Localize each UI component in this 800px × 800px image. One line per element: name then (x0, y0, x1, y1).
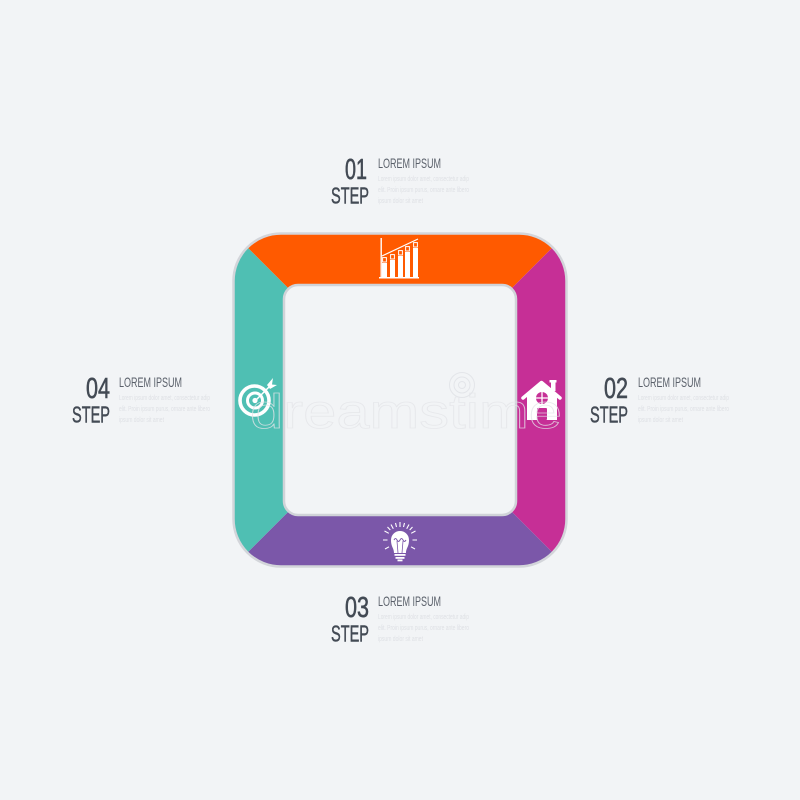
step 04 body text (119, 395, 210, 424)
step 03 number: 03 (345, 592, 369, 624)
step 03 body text: Lorem ipsum dolor amet, consectetur adip (378, 614, 469, 621)
outer edge (234, 234, 566, 566)
step 04 label: STEP (72, 402, 110, 428)
ring segment: step 1 orange (248, 234, 552, 288)
step 01 number: 01 (345, 154, 367, 186)
step 04 body text: ipsum dolor sit amet (119, 417, 164, 424)
step 01 heading: LOREM IPSUM (378, 155, 441, 171)
step 04 number: 04 (86, 373, 110, 405)
icon: light bulb (383, 522, 417, 561)
icon: bar chart (379, 238, 419, 278)
step 03 body text: ipsum dolor sit amet (378, 636, 423, 643)
step 02 body text: ipsum dolor sit amet (638, 417, 683, 424)
step 01 body text (378, 176, 469, 205)
step 03 label: STEP (331, 620, 369, 646)
step 02 label: STEP (590, 402, 628, 428)
watermark (250, 372, 562, 439)
rounded square ring (233, 233, 567, 567)
step 02 number: 02 (604, 373, 628, 405)
inner panel (284, 285, 516, 515)
step 04 text block (72, 373, 210, 428)
step 02 body text: Lorem ipsum dolor amet, consectetur adip (638, 395, 729, 402)
step 02 body text (638, 395, 729, 424)
step 04 body text: elit. Proin ipsum purus, ornare ante libero (119, 406, 210, 413)
step 01 body text: elit. Proin ipsum purus, ornare ante libero (378, 187, 469, 194)
step 02 heading: LOREM IPSUM (638, 374, 701, 390)
step 03 heading: LOREM IPSUM (378, 593, 441, 609)
step 01 text block (331, 154, 469, 208)
step 01 label: STEP (331, 182, 369, 208)
step 03 text block (331, 592, 469, 646)
ring segment: step 2 magenta (512, 248, 566, 552)
step 01 body text: Lorem ipsum dolor amet, consectetur adip (378, 176, 469, 183)
step 01 body text: ipsum dolor sit amet (378, 198, 423, 205)
icon: house (523, 380, 560, 420)
watermark: dreamstime (250, 386, 562, 439)
step 02 body text: elit. Proin ipsum purus, ornare ante libero (638, 406, 729, 413)
icon: target (240, 378, 277, 415)
step 04 body text: Lorem ipsum dolor amet, consectetur adip (119, 395, 210, 402)
step 03 body text (378, 614, 469, 643)
step 03 body text: elit. Proin ipsum purus, ornare ante libero (378, 625, 469, 632)
ring segment: step 3 purple (248, 512, 552, 566)
step 02 text block (590, 373, 729, 428)
ring segment: step 4 teal (234, 248, 288, 552)
step 04 heading: LOREM IPSUM (119, 374, 182, 390)
